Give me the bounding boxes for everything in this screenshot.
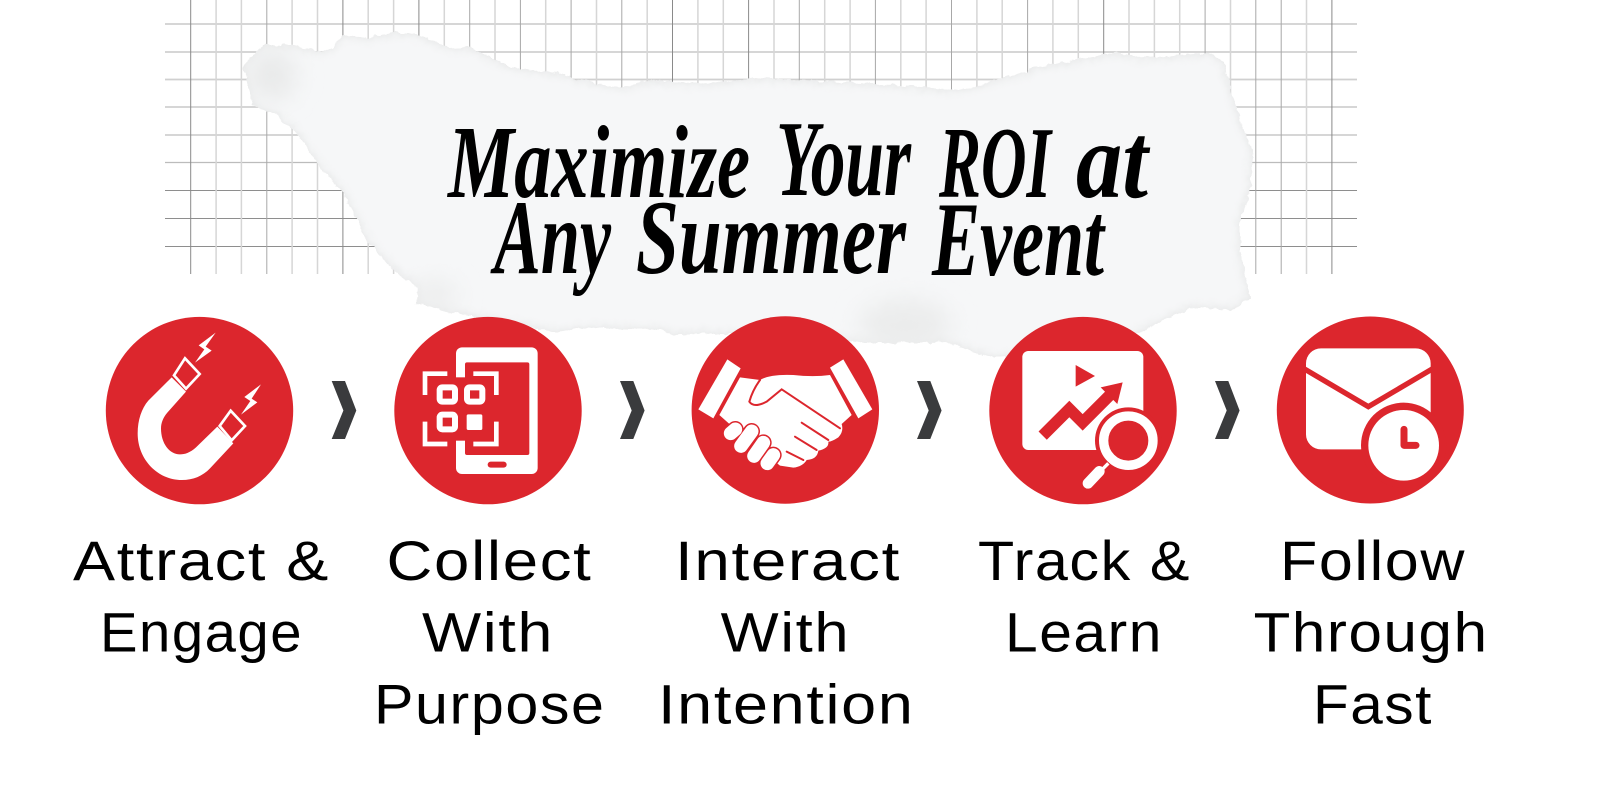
title: at	[1076, 102, 1151, 221]
torn paper	[243, 33, 1253, 358]
label: Track & Learn: Track &	[978, 529, 1191, 592]
label: Follow Through Fast: Follow	[1280, 529, 1466, 592]
step 4 icon: chart with magnifier	[989, 317, 1177, 504]
title: Any	[490, 179, 612, 296]
title: Summer	[636, 179, 907, 296]
label: Collect With Purpose	[374, 529, 606, 735]
title: Event	[931, 181, 1106, 298]
step 1 icon: magnet	[106, 317, 293, 504]
label: Track & Learn: Learn	[1005, 601, 1163, 664]
arrow 3	[917, 381, 942, 439]
arrow 1	[332, 381, 356, 439]
title: Maximize	[447, 105, 750, 220]
title	[447, 100, 1151, 298]
arrow 4	[1215, 381, 1240, 439]
label: Track & Learn	[978, 529, 1191, 664]
label: Collect With Purpose: Collect	[386, 529, 592, 592]
label: Interact With Intention: Interact	[675, 529, 901, 592]
label: Attract & Engage	[73, 529, 330, 664]
label: Attract & Engage: Engage	[100, 601, 303, 664]
label: Attract & Engage: Attract &	[73, 529, 330, 592]
step 5 icon: envelope with clock	[1277, 316, 1464, 504]
step 3 icon: handshake	[692, 316, 879, 504]
label: Collect With Purpose: With	[422, 601, 554, 664]
step 2 icon: tablet with QR code	[394, 317, 582, 504]
label: Collect With Purpose: Purpose	[374, 672, 606, 735]
label: Interact With Intention	[658, 529, 914, 735]
arrow 2	[620, 381, 645, 439]
label: Follow Through Fast: Fast	[1313, 672, 1433, 735]
graph paper grid	[165, 0, 1357, 274]
label: Interact With Intention: With	[721, 601, 850, 664]
label: Interact With Intention: Intention	[658, 672, 914, 735]
label: Follow Through Fast: Through	[1254, 601, 1489, 664]
title: Your	[776, 100, 912, 219]
label: Follow Through Fast	[1254, 529, 1489, 735]
title: ROI	[938, 107, 1053, 220]
